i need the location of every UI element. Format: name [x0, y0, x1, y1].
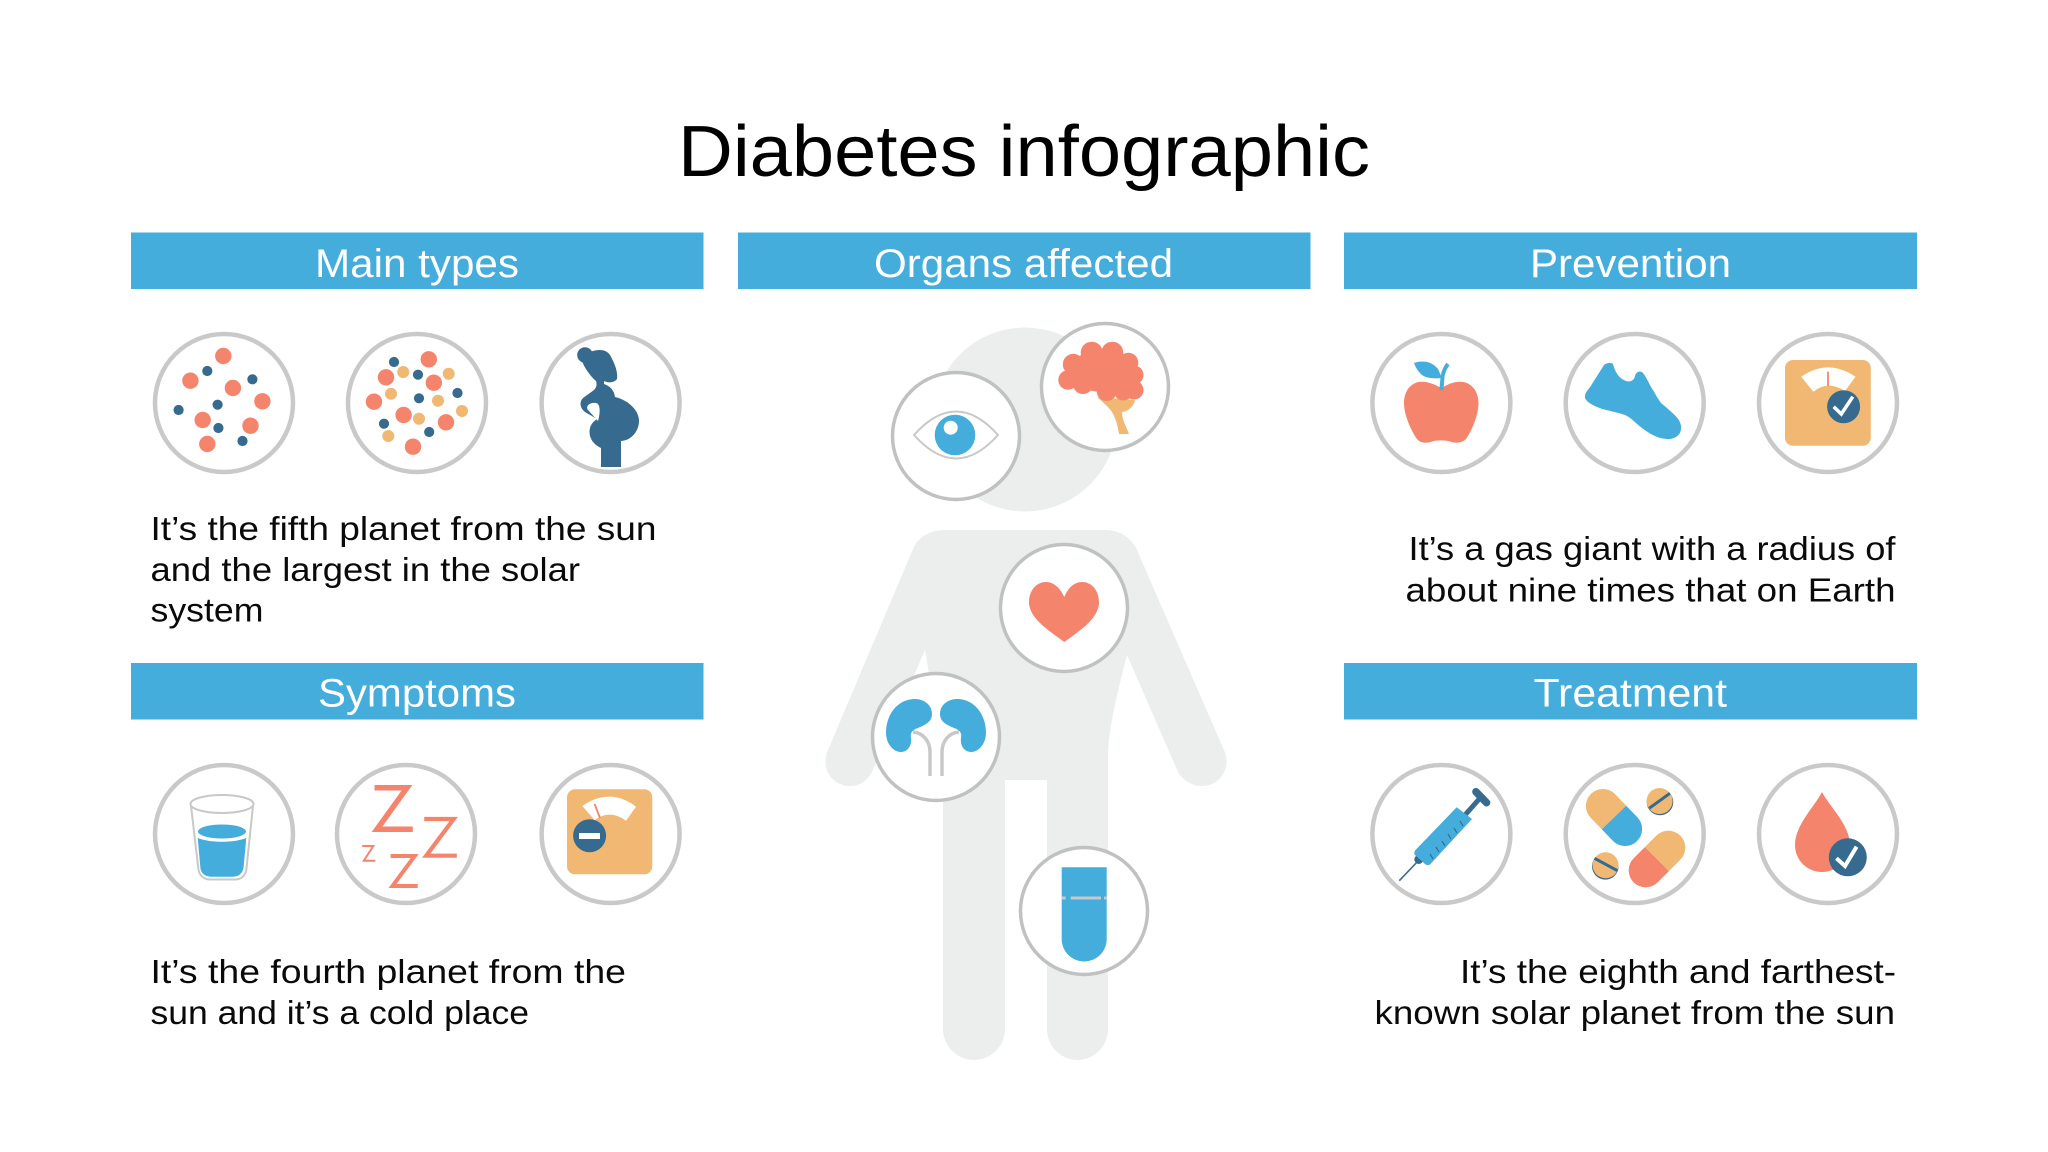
text: prevention description — [1406, 531, 1896, 610]
icon: type 1 dots — [155, 334, 293, 472]
icon: brain — [1042, 324, 1168, 450]
icon: running shoe — [1566, 334, 1704, 472]
icon: apple — [1372, 334, 1510, 472]
icon: scale with check — [1759, 334, 1897, 472]
heading: symptoms: Symptoms — [318, 672, 516, 716]
heading: symptoms — [131, 663, 704, 720]
icon: syringe — [1372, 765, 1510, 903]
text: treatment description — [1374, 954, 1896, 1032]
icon: kidneys — [872, 674, 1000, 800]
title: Diabetes infographic — [678, 112, 1370, 192]
text: symptoms description: sun and it’s a cold place — [150, 995, 529, 1032]
heading: treatment: Treatment — [1534, 672, 1727, 716]
heading: main types: Main types — [315, 242, 519, 286]
text: prevention description: It’s a gas giant with a radius of — [1408, 531, 1896, 568]
panel: treatment — [1344, 663, 1917, 1032]
icon: eye — [892, 372, 1020, 500]
heading: prevention: Prevention — [1530, 242, 1731, 286]
text: treatment description: It’s the eighth and farthest- — [1460, 954, 1896, 991]
heading: organs affected — [738, 232, 1310, 289]
heading: prevention — [1344, 232, 1917, 289]
panel: organs affected — [738, 232, 1310, 1060]
text: main types description: system — [150, 592, 264, 630]
icon: blue organ tube — [1020, 848, 1148, 974]
heading: organs affected: Organs affected — [874, 242, 1173, 286]
icon: heart — [1000, 544, 1128, 672]
icon: sleepy Z letters — [337, 765, 475, 903]
heading: main types — [131, 232, 704, 289]
icon: type 2 dots — [348, 334, 486, 472]
text: main types description: and the largest in the solar — [150, 552, 580, 589]
icon: blood drop with check — [1759, 765, 1897, 903]
icon: scale with minus — [542, 765, 680, 903]
text: symptoms description: It’s the fourth planet from the — [150, 954, 626, 991]
icon: pregnant woman — [542, 334, 680, 472]
panel: main types — [131, 232, 704, 630]
icon: pills — [1566, 765, 1704, 903]
panel: symptoms — [131, 663, 704, 1032]
text: treatment description: known solar planet from the sun — [1374, 995, 1895, 1032]
text: symptoms description — [150, 954, 626, 1032]
panel: prevention — [1344, 232, 1917, 610]
human silhouette — [825, 328, 1227, 1060]
text: main types description: It’s the fifth planet from the sun — [150, 511, 656, 548]
text: prevention description: about nine times that on Earth — [1406, 572, 1896, 610]
heading: treatment — [1344, 663, 1917, 720]
icon: glass of water — [155, 765, 293, 903]
text: main types description — [150, 511, 656, 630]
